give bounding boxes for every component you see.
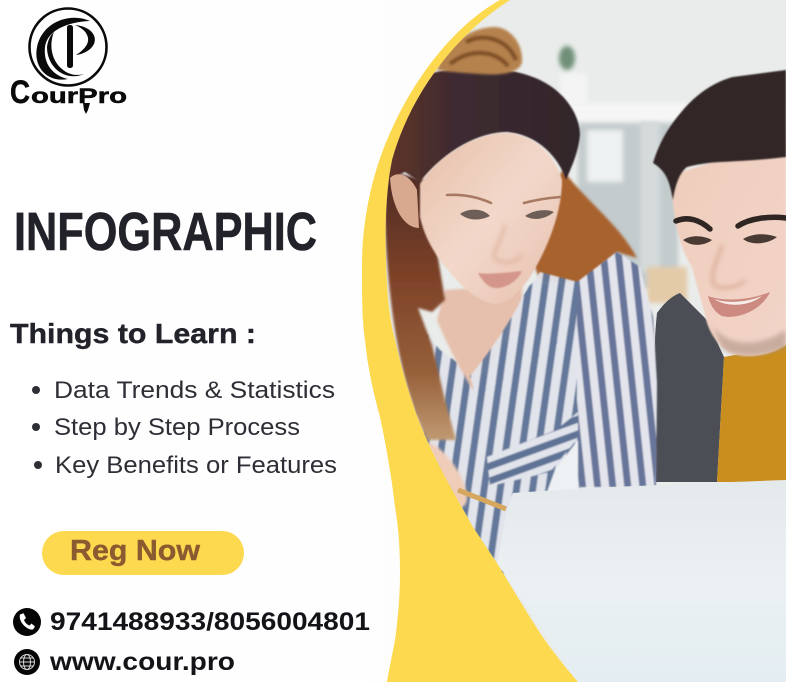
- man's smile: [708, 292, 770, 317]
- man's stubble: [712, 325, 786, 356]
- woman's collar: [470, 272, 578, 396]
- phone numbers: 9741488933/8056004801: [50, 608, 370, 636]
- man's eyes: [683, 234, 777, 245]
- woman's loose hair: [384, 170, 456, 440]
- button: Reg Now: Reg Now: [70, 535, 200, 567]
- point: data trends: Data Trends & Statistics: [54, 377, 335, 404]
- learning points list: [32, 377, 337, 479]
- woman's hair top: [388, 68, 580, 182]
- icon: phone: [13, 608, 41, 636]
- logo emblem: [30, 8, 106, 86]
- yellow curved band: [362, 0, 600, 682]
- man's sweater: [654, 293, 724, 482]
- icon: globe: [14, 649, 40, 675]
- point: process: Step by Step Process: [54, 414, 300, 441]
- laptop: [497, 480, 786, 682]
- woman's hand and pen: [428, 442, 467, 507]
- woman's eyebrows: [447, 195, 560, 203]
- woman's bun: [437, 27, 522, 74]
- website: www.cour.pro: [49, 648, 235, 676]
- bun shading: [450, 38, 516, 66]
- woman's hair behind the shoulder: [534, 170, 638, 282]
- woman's shirt: [405, 252, 657, 575]
- title: INFOGRAPHIC: [14, 202, 317, 262]
- man's nose shadow: [712, 245, 745, 288]
- subheading: Things to Learn :: [10, 318, 256, 349]
- logo: [10, 8, 127, 114]
- woman's eyes: [460, 210, 554, 220]
- man: [653, 70, 786, 482]
- woman's face: [420, 133, 562, 304]
- logo wordmark: C: [10, 74, 30, 110]
- button: Reg Now: [42, 531, 244, 575]
- phone contact: [13, 608, 370, 636]
- woman's neck and chest: [437, 285, 522, 390]
- woman's nose shadow: [494, 225, 522, 263]
- photo: two students at a laptop: [380, 0, 786, 682]
- woman's ear: [390, 174, 419, 228]
- logo wordmark: ourPro: [31, 85, 127, 108]
- website contact: [14, 648, 235, 676]
- man's eyebrows: [676, 217, 786, 229]
- logo wordmark: [10, 74, 127, 110]
- logo pen nib: [83, 103, 90, 114]
- photo background: blurred office: [380, 0, 786, 682]
- woman's lips: [478, 271, 522, 288]
- man's mustard shirt: [717, 345, 786, 482]
- point: benefits: Key Benefits or Features: [55, 452, 337, 479]
- man's face: [671, 140, 786, 356]
- man's hair: [653, 70, 786, 200]
- woman: [384, 27, 657, 575]
